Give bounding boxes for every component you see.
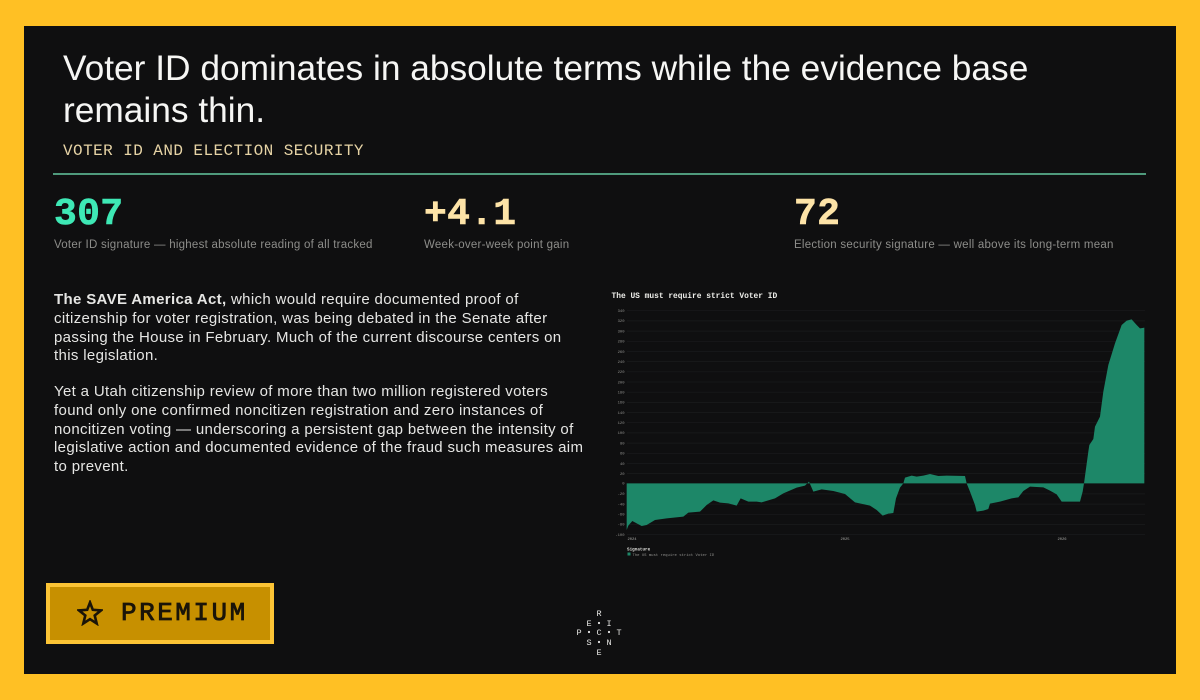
y axis labels [615, 310, 625, 538]
x axis labels [627, 538, 1067, 542]
logo: RECEPTIONS letter mark: S [586, 638, 592, 648]
icon: star [77, 600, 103, 626]
logo: RECEPTIONS letter mark: C [596, 628, 602, 638]
y axis labels: 240 [618, 361, 625, 365]
y axis labels: 60 [620, 453, 625, 457]
stat: 307 [54, 193, 373, 251]
stat: 72 [794, 193, 1114, 251]
y axis labels: 220 [618, 371, 625, 375]
chart: The US must require strict Voter ID [612, 292, 1145, 558]
text block: Utah citizenship review: to prevent. [54, 458, 129, 475]
y axis labels: -60 [618, 514, 625, 518]
y axis labels: 300 [618, 330, 625, 334]
area series [627, 319, 1144, 530]
y axis labels: 160 [618, 402, 625, 406]
text block: Utah citizenship review [54, 383, 583, 475]
y axis labels: 180 [618, 392, 625, 396]
y axis labels: 260 [618, 351, 625, 355]
title: Voter ID dominates in absolute terms while the evidence base [63, 49, 1028, 88]
logo: RECEPTIONS letter mark: E [586, 619, 592, 629]
logo: RECEPTIONS letter mark: T [616, 628, 622, 638]
text block: Utah citizenship review: Yet a Utah citizenship review of more than two million registered voters [54, 383, 548, 400]
chart legend: The US must require strict Voter ID [632, 553, 715, 558]
text block: SAVE America Act [54, 291, 561, 364]
y axis labels: 200 [618, 381, 625, 385]
text block: SAVE America Act: passing the House in February. Much of the current discourse centers on [54, 329, 561, 346]
logo: RECEPTIONS letter mark: R [596, 609, 602, 619]
stat caption: +4.1: Week-over-week point gain [424, 239, 569, 251]
stat caption: 307: Voter ID signature — highest absolute reading of all tracked [54, 239, 373, 251]
title [63, 49, 1028, 130]
y axis labels: 40 [620, 463, 625, 467]
stat value: 72: 72 [794, 193, 840, 236]
title: remains thin. [63, 91, 265, 130]
y axis labels: 20 [620, 473, 625, 477]
subtitle: VOTER ID AND ELECTION SECURITY [63, 142, 364, 160]
premium label: PREMIUM [121, 598, 248, 628]
stat value: 307: 307 [54, 193, 123, 236]
chart legend [627, 548, 715, 558]
x axis labels: 2024 [627, 538, 637, 542]
y axis labels: 140 [618, 412, 625, 416]
logo: RECEPTIONS letter mark: I [606, 619, 612, 629]
text block: Utah citizenship review: noncitizen voting — underscoring a persistent gap between the intensity of [54, 421, 574, 438]
x axis labels: 2026 [1057, 538, 1067, 542]
logo: RECEPTIONS letter mark: N [606, 638, 612, 648]
logo: RECEPTIONS letter mark [576, 609, 622, 658]
x axis labels: 2025 [840, 538, 850, 542]
y axis labels: -80 [618, 524, 625, 528]
premium badge [46, 583, 274, 644]
text block: Utah citizenship review: legislative action and documented evidence of the fraud such measures aim [54, 439, 583, 456]
stat value: +4.1: +4.1 [424, 193, 516, 236]
logo: RECEPTIONS letter mark: E [596, 648, 602, 658]
y axis labels: 340 [618, 310, 625, 314]
y axis labels: 320 [618, 320, 625, 324]
y axis labels: -40 [618, 503, 625, 507]
stat: +4.1 [424, 193, 569, 251]
y axis labels: -20 [618, 493, 625, 497]
text block: SAVE America Act: citizenship for voter registration, was being debated in the Senate after [54, 310, 547, 327]
text block: SAVE America Act: this legislation. [54, 347, 158, 364]
text block: SAVE America Act: The SAVE America Act, which would require documented proof of [54, 291, 519, 308]
chart legend: Signature [627, 548, 651, 552]
chart title: The US must require strict Voter ID [612, 292, 777, 301]
stat caption: 72: Election security signature — well above its long-term mean [794, 239, 1114, 251]
y axis labels: -100 [615, 534, 625, 538]
y axis labels: 100 [618, 432, 625, 436]
text block: Utah citizenship review: found only one confirmed noncitizen registration and zero instances of [54, 402, 543, 419]
logo: RECEPTIONS letter mark: P [576, 628, 582, 638]
y axis labels: 80 [620, 442, 625, 446]
y axis labels: 280 [618, 341, 625, 345]
y axis labels: 0 [622, 483, 625, 487]
y axis labels: 120 [618, 422, 625, 426]
